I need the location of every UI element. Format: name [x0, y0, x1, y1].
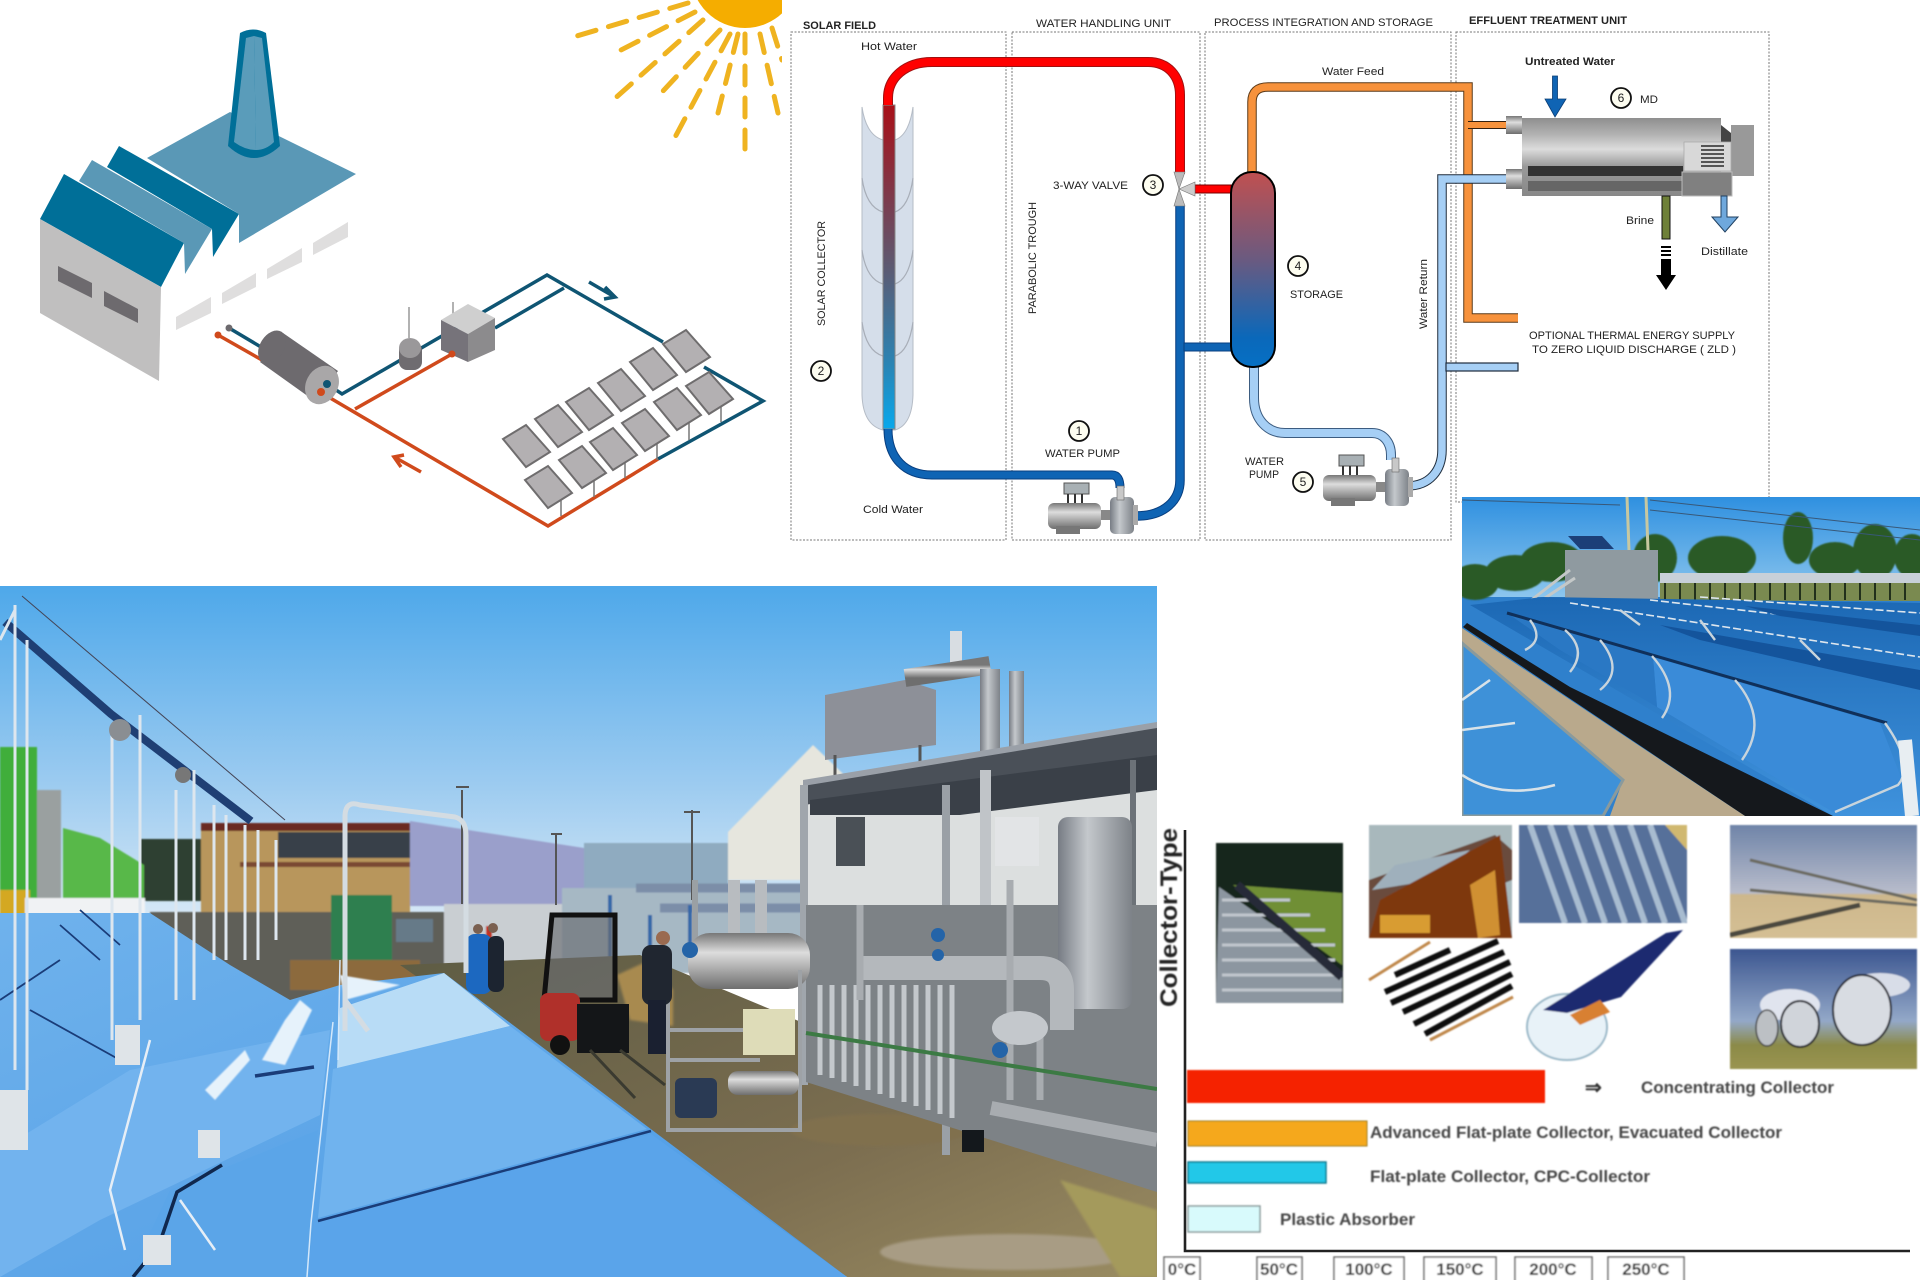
membrane modules: [820, 985, 952, 1118]
lower mirror panel: [512, 1187, 847, 1277]
upper light mirror panel: [337, 973, 510, 1069]
thumbnail: evacuated tube collector: [1519, 825, 1687, 923]
pipe end caps: [214, 324, 232, 338]
marker numerals: 2: [818, 364, 825, 378]
arrow: untreated water: [1545, 76, 1566, 117]
chart thumbnails: [1216, 825, 1917, 1069]
black bucket: [962, 1130, 984, 1152]
vertical vessel: [1058, 817, 1132, 1009]
sun with rays: [575, 0, 782, 152]
bar labels: ⇒: [1585, 1077, 1602, 1099]
temperature axis ticks: 0°C: [1168, 1260, 1196, 1279]
temperature axis ticks: 100°C: [1345, 1260, 1393, 1279]
blue pumps: [675, 1078, 717, 1118]
skid frame: [668, 970, 800, 1130]
rooftop unit: [825, 631, 1024, 775]
photo: parabolic trough plant with process equipment: [0, 586, 1157, 1277]
bar labels: Flat-plate Collector, CPC-Collector: [1370, 1167, 1650, 1186]
collector support frames: [0, 596, 466, 1250]
marker numerals: 1: [1076, 424, 1083, 438]
storage box: [441, 302, 495, 362]
small tank: [399, 307, 422, 370]
blue valves: [682, 928, 1008, 1058]
silver disc: [992, 1011, 1048, 1045]
diagram labels: PARABOLIC TROUGH: [1027, 202, 1039, 314]
diagram labels: Water Return: [1418, 259, 1430, 329]
lamp posts: [456, 787, 700, 905]
unit headings: WATER HANDLING UNIT: [1036, 18, 1171, 30]
distant ground and fence: [1660, 573, 1920, 601]
temperature axis ticks: 200°C: [1529, 1260, 1577, 1279]
left mirror facets: [130, 1130, 318, 1277]
ground: [400, 955, 1157, 1277]
solar collector trough: [862, 105, 913, 430]
sky: [0, 586, 1157, 916]
mirror field: [0, 910, 847, 1277]
hot water pipe: [888, 62, 1231, 193]
gravel pile and puddle: [617, 960, 1157, 1277]
arrow: distillate: [1712, 196, 1738, 232]
tent backdrop behind frame: [805, 790, 1157, 910]
foreground white pipe: [1905, 740, 1912, 816]
process diagram: [791, 15, 1769, 540]
rear row dark shadows: [1660, 606, 1920, 690]
factory chimney: [228, 30, 280, 158]
background buildings: [0, 745, 860, 1012]
shed with solar panels: [1565, 536, 1658, 600]
diagram labels: Cold Water: [863, 504, 923, 516]
white control box: [995, 817, 1039, 866]
marker numerals: 6: [1618, 91, 1625, 105]
diagram labels: Untreated Water: [1525, 56, 1616, 68]
unit headings: EFFLUENT TREATMENT UNIT: [1469, 15, 1627, 27]
trees: [1451, 512, 1920, 600]
water pump 2: [1323, 455, 1413, 506]
thumbnail: trough cross-section: [1527, 930, 1683, 1060]
bar labels: Advanced Flat-plate Collector, Evacuated Collector: [1370, 1123, 1782, 1142]
foreground glass trough: [1462, 643, 1623, 816]
diagram labels: 3-WAY VALVE: [1053, 180, 1128, 192]
storage tank: [1231, 172, 1275, 367]
stairs: [1525, 570, 1575, 608]
rear row rails: [1570, 597, 1920, 657]
front rail: [1507, 613, 1887, 723]
diagram labels: [816, 41, 1748, 516]
solar panels array: [503, 330, 733, 516]
temperature axis ticks: 150°C: [1436, 1260, 1484, 1279]
diagram labels: Hot Water: [861, 41, 917, 53]
bar labels: [1280, 1077, 1834, 1229]
thumbnail: dish concentrators: [1730, 949, 1917, 1069]
diagram labels: PUMP: [1249, 469, 1279, 481]
axes: [1185, 830, 1910, 1251]
steel frame: [800, 722, 1157, 1180]
trough ribs: [1525, 610, 1904, 812]
mirror seams: [0, 910, 651, 1277]
foreground glass ribs: [1462, 680, 1555, 791]
membrane distillation unit: [1506, 116, 1754, 196]
thumbnail: plastic absorber: [1216, 843, 1343, 1003]
thumbnail: parabolic trough field: [1730, 825, 1917, 938]
unit headings: SOLAR FIELD: [803, 20, 876, 32]
factory windows: [58, 266, 138, 323]
fan unit: [836, 817, 865, 866]
flow arrow: hot: [394, 455, 421, 472]
front trough highlights: [1653, 657, 1902, 812]
numbered markers: [811, 88, 1631, 492]
reflections on mirror: [205, 975, 400, 1100]
diagram labels: OPTIONAL THERMAL ENERGY SUPPLY: [1529, 330, 1736, 342]
diagram labels: WATER: [1245, 456, 1284, 468]
diagram labels: Distillate: [1701, 246, 1748, 258]
orange feed pipe: [1252, 87, 1518, 318]
factory side strips: [176, 222, 348, 330]
rear mirror rows: [1470, 597, 1920, 816]
lower vessel: [728, 1071, 799, 1095]
factory saw-tooth roof: [40, 146, 239, 287]
heat exchanger drum: [252, 325, 346, 410]
unit headings: PROCESS INTEGRATION AND STORAGE: [1214, 17, 1433, 29]
factory wall: [40, 219, 161, 381]
y axis title: Collector-Type: [1156, 828, 1183, 1007]
flow arrow: cold: [589, 282, 615, 299]
cold pipe loop: [229, 275, 763, 459]
bar labels: Concentrating Collector: [1641, 1078, 1834, 1097]
diagram labels: TO ZERO LIQUID DISCHARGE ( ZLD ): [1532, 344, 1736, 356]
power lines: [1462, 500, 1920, 540]
utility poles: [1627, 497, 1648, 550]
marker numerals: 5: [1300, 475, 1307, 489]
hot pipe loop: [218, 335, 658, 526]
gravel strip: [1462, 628, 1745, 816]
diagram labels: SOLAR COLLECTOR: [816, 221, 828, 326]
factory illustration: [40, 30, 763, 526]
control cabinet: [743, 1009, 795, 1055]
bars: [1187, 1070, 1545, 1232]
marker numerals: 4: [1295, 259, 1302, 273]
marker numerals: 3: [1150, 178, 1157, 192]
workers: [466, 923, 672, 1054]
middle mirror panel: [318, 1026, 647, 1218]
three way valve: [1174, 172, 1195, 206]
collector type chart: [1156, 825, 1917, 1280]
piping: [806, 880, 1157, 1140]
arrow: brine: [1656, 196, 1676, 290]
unit headings: [803, 15, 1627, 32]
forklift: [540, 915, 665, 1098]
temperature axis ticks: [1164, 1257, 1684, 1280]
horizontal vessel: [688, 933, 810, 989]
skid towers: [692, 880, 767, 980]
temperature axis ticks: 250°C: [1622, 1260, 1670, 1279]
cold water pipes: [888, 205, 1231, 516]
thumbnail: flat-plate diagram: [1369, 941, 1513, 1040]
black base strip: [1463, 623, 1833, 816]
diagram labels: Brine: [1626, 215, 1654, 227]
light blue return pipes: [1254, 179, 1518, 486]
diagram labels: Water Feed: [1322, 66, 1384, 78]
water pump 1: [1048, 483, 1138, 534]
factory rear roof: [147, 112, 356, 243]
bar labels: Plastic Absorber: [1280, 1210, 1415, 1229]
pulleys and brackets: [0, 719, 220, 1265]
diagram labels: WATER PUMP: [1045, 448, 1120, 460]
sky: [1462, 497, 1920, 597]
temperature axis ticks: 50°C: [1260, 1260, 1298, 1279]
marker numerals: [818, 91, 1625, 489]
machinery mass: [806, 905, 1157, 1192]
dashed unit boxes: [791, 32, 1769, 540]
diagram labels: STORAGE: [1290, 289, 1343, 301]
process plant equipment: [668, 631, 1157, 1192]
diagram labels: MD: [1640, 94, 1658, 106]
thumbnail: house with flat-plate collector: [1369, 825, 1512, 938]
photo: parabolic trough collector array: [1451, 497, 1920, 816]
